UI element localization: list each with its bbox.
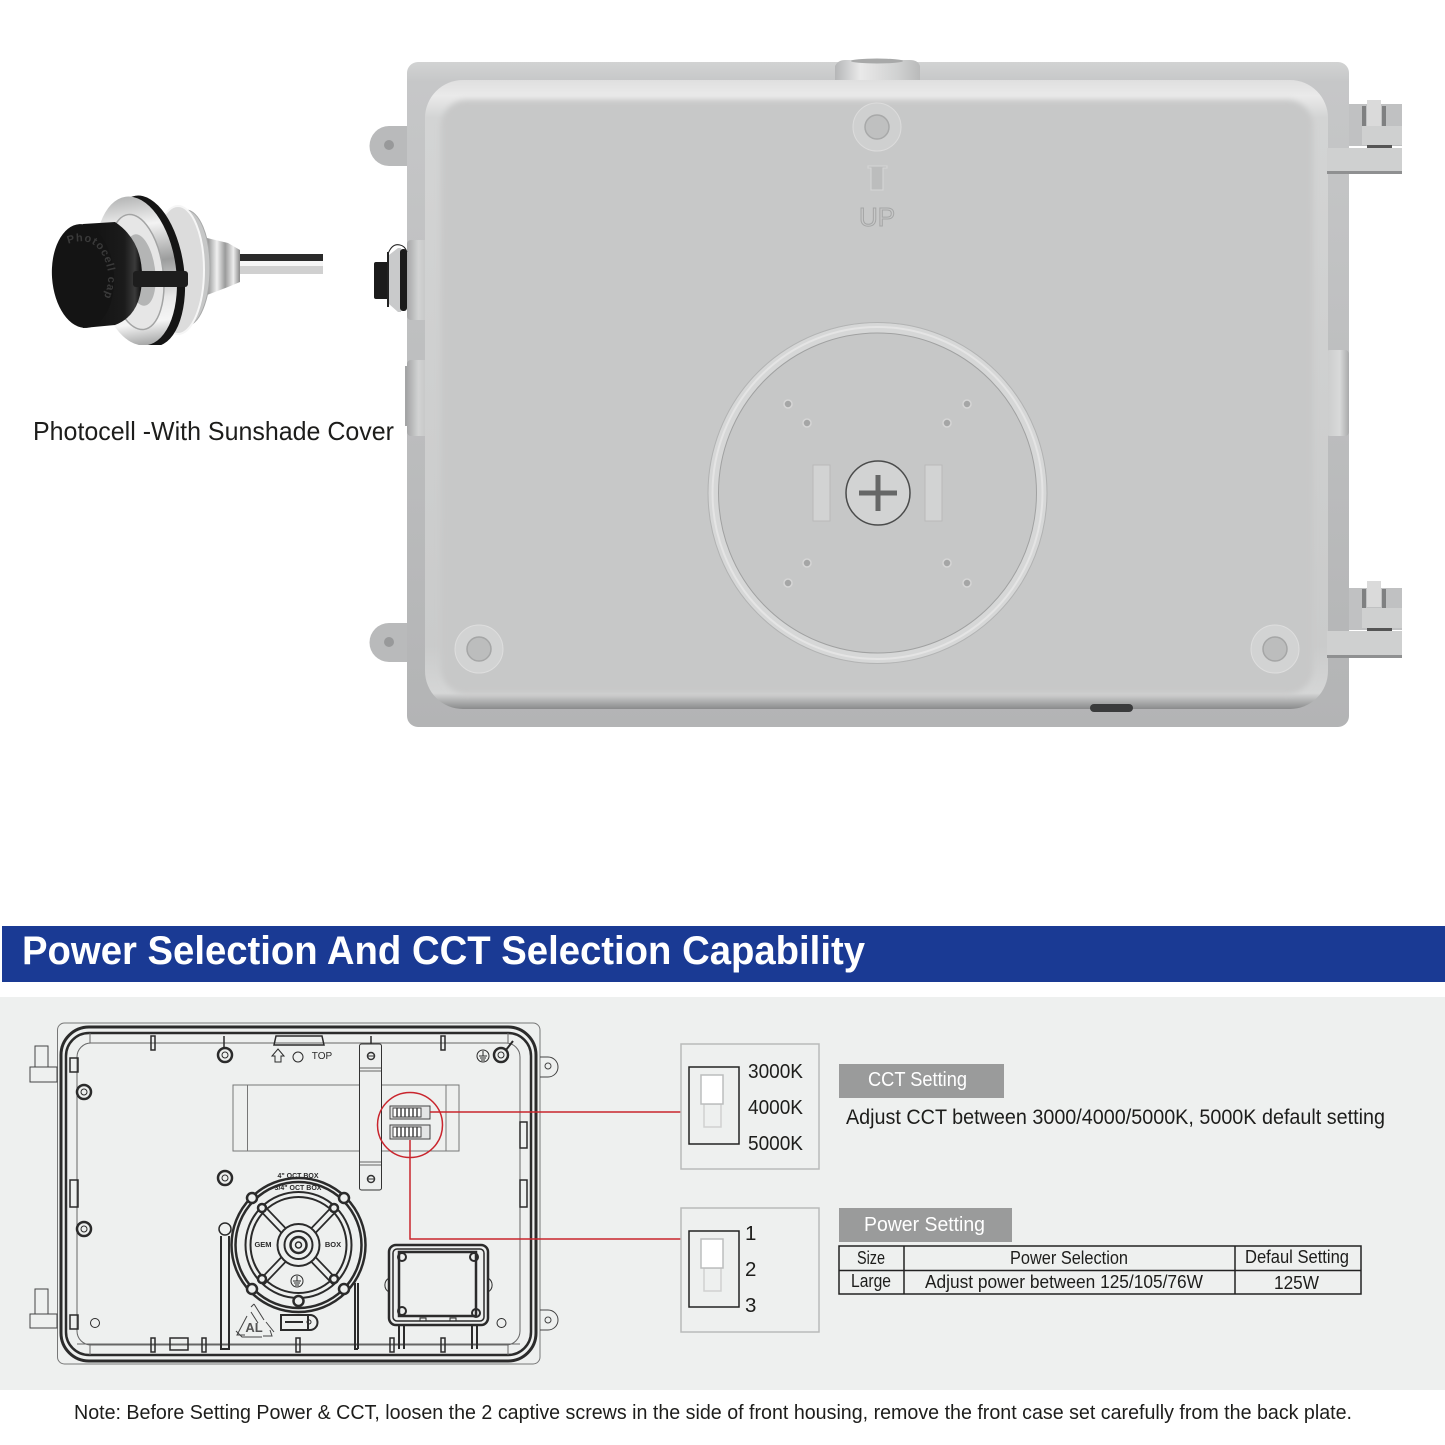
back plate (407, 62, 1349, 727)
diagram octagonal box mount (232, 1173, 366, 1312)
power table: 125W (1274, 1273, 1319, 1293)
CCT switch body (689, 1067, 739, 1144)
power options: 3 (745, 1294, 756, 1317)
banner heading: Power Selection And CCT Selection Capability (22, 929, 866, 973)
power options: 1 (745, 1222, 756, 1245)
power table: Power Selection (1010, 1248, 1128, 1268)
panel: settings (0, 997, 1445, 1390)
diagram latch (281, 1315, 318, 1330)
footnote: Note: Before Setting Power & CCT, loosen the 2 captive screws in the side of front housing, remove the front case set carefully from the back plate. (74, 1402, 1352, 1424)
CCT description: Adjust CCT between 3000/4000/5000K, 5000K default setting (846, 1106, 1385, 1129)
diagram hinges and ears (30, 1046, 558, 1330)
diagram octagonal box mount: GEM (254, 1240, 272, 1249)
housing left mounting ear bottom (370, 623, 425, 662)
power table: Adjust power between 125/105/76W (925, 1272, 1203, 1292)
CCT options: 3000K (748, 1060, 803, 1083)
housing left mounting ear top (370, 126, 425, 166)
power table: Defaul Setting (1245, 1247, 1349, 1267)
diagram octagonal box mount: 3/4" OCT BOX (275, 1185, 322, 1192)
CCT switch panel (681, 1044, 819, 1169)
photocell caption: Photocell -With Sunshade Cover (33, 416, 394, 446)
diagram dip switches (390, 1106, 430, 1139)
power setting heading (839, 1208, 1012, 1242)
CCT options: 5000K (748, 1132, 803, 1155)
diagram small circles (90, 1318, 506, 1328)
power switch body (689, 1231, 739, 1307)
photocell detail illustration (52, 196, 323, 345)
hinge bottom (1327, 581, 1402, 658)
CCT options: 4000K (748, 1096, 803, 1119)
diagram ground symbol (477, 1050, 489, 1062)
hinge top (1327, 100, 1402, 174)
bottom-left screw boss (455, 625, 503, 673)
CCT setting heading (839, 1064, 1004, 1098)
diagram top notch and TOP marker: TOP (312, 1051, 333, 1062)
diagram recycling mark: AL (245, 1320, 263, 1335)
CCT setting heading: CCT Setting (868, 1069, 967, 1091)
CCT options (748, 1060, 803, 1155)
diagram recycling mark (236, 1304, 274, 1337)
power table (839, 1246, 1361, 1294)
power table: Large (851, 1271, 891, 1291)
mounting holes (784, 400, 971, 587)
diagram octagonal box mount: BOX (325, 1240, 341, 1249)
circular mount ring (708, 322, 1047, 664)
diagram tabs (70, 1036, 527, 1352)
mounting tabs (813, 465, 942, 521)
diagram outer plate (58, 1023, 540, 1364)
diagram junction box (385, 1245, 492, 1349)
diagram bracket (360, 1044, 382, 1190)
product: LED housing back view (370, 58, 1402, 727)
diagram screw bosses (77, 1041, 513, 1349)
diagram octagonal box mount: 4" OCT BOX (277, 1173, 319, 1180)
photocell body and cap (52, 196, 240, 345)
bottom plug (1090, 704, 1133, 712)
top conduit knob (835, 58, 920, 82)
photocell wires (240, 254, 323, 274)
power switch panel (681, 1208, 819, 1332)
red callout connectors (378, 1092, 681, 1239)
power setting heading: Power Setting (864, 1214, 985, 1236)
power table: Size (857, 1248, 885, 1268)
top screw boss and up marker (853, 103, 901, 232)
photocell installed on housing (374, 245, 407, 312)
photocell body and cap: Photocell cap (67, 234, 116, 298)
center phillips screw (846, 461, 910, 525)
diagram driver box (233, 1085, 459, 1151)
power options (745, 1222, 756, 1317)
wiring diagram of housing interior (30, 1023, 558, 1364)
bottom-right screw boss (1251, 625, 1299, 673)
side bosses (405, 240, 1349, 436)
diagram top notch and TOP marker (272, 1036, 333, 1062)
diagram housing walls (61, 1027, 536, 1361)
section banner (2, 926, 1445, 982)
power options: 2 (745, 1258, 756, 1281)
raised cover rim (425, 80, 1328, 709)
top screw boss and up marker: UP (859, 202, 895, 232)
cover face (441, 100, 1313, 694)
